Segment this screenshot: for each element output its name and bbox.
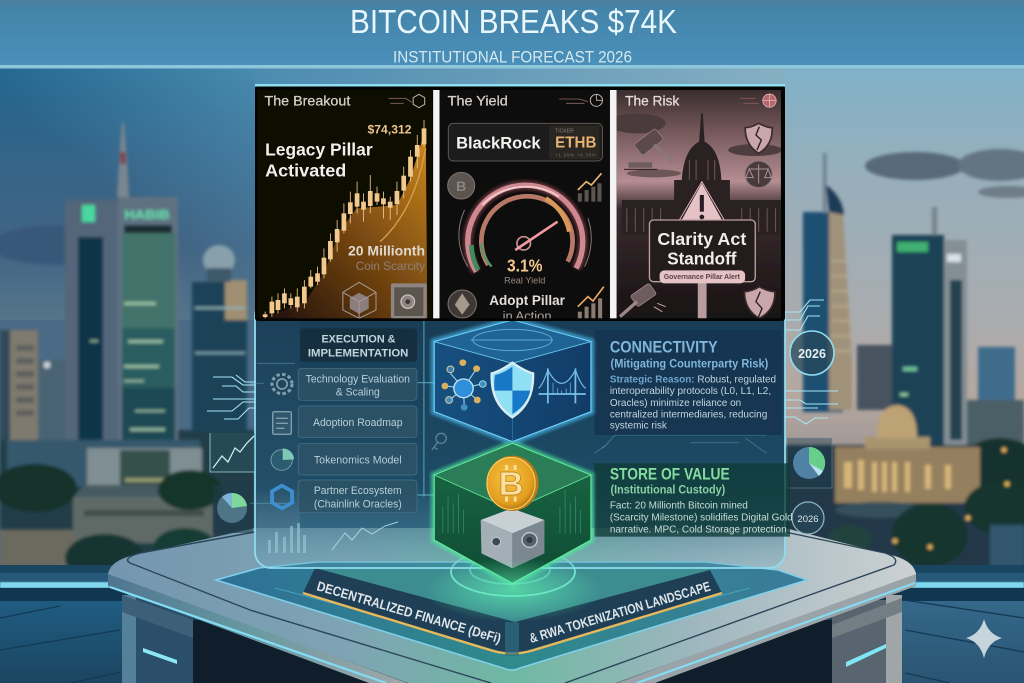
icon: shield (492, 363, 533, 417)
connectivity subheading: (Mitigating Counterparty Risk) (611, 357, 768, 370)
icon: safe (391, 283, 427, 318)
connectivity body: Strategic Reason: (610, 375, 695, 386)
connectivity text panel (594, 330, 782, 435)
card heading: the breakout: The Breakout (264, 94, 350, 109)
icon: circuit cube (389, 94, 425, 108)
hologram panel (207, 300, 838, 568)
pedestal label right: & RWA TOKENIZATION LANDSCAPE (528, 579, 712, 646)
icon: wire cube (343, 282, 376, 318)
lower dashboard (execution column, cubes, text panels) (250, 320, 796, 583)
warning sign: Standoff (667, 248, 737, 268)
headline: legacy pillar: Activated (265, 160, 346, 180)
icon: bitcoin coin (486, 456, 539, 511)
card: the risk (608, 90, 782, 318)
store of value text panel (594, 463, 796, 537)
2026 badge small (792, 502, 824, 534)
holo line chart (332, 522, 398, 550)
background: left skyline (0, 123, 255, 582)
card: the yield: Real Yield (504, 275, 545, 285)
2026 badge small: 2026 (797, 514, 819, 525)
card heading: the yield: The Yield (448, 94, 508, 109)
card: the yield (440, 90, 610, 323)
ticker box: TICKER (555, 128, 574, 134)
icon: gavel bottom (620, 283, 666, 317)
caption: adopt pillar: Adopt Pillar (489, 292, 565, 308)
icon: key (432, 433, 446, 450)
card heading: the risk: The Risk (625, 94, 679, 109)
sign: habib: HABIB (124, 207, 170, 222)
pedestal (303, 548, 722, 656)
three news cards (257, 90, 782, 323)
2026 badge large (790, 331, 834, 375)
table recess (216, 562, 807, 670)
store of value body: narrative. MPC, Cold Storage protection (610, 525, 787, 536)
item: technology evaluation (298, 368, 417, 400)
icon: cracked shield bottom (744, 287, 775, 318)
connectivity body: Oracles) minimize reliance on (610, 398, 741, 409)
icon: bitcoin coin: B (499, 465, 523, 503)
pedestal label left: DECENTRALIZED FINANCE (DeFi) (315, 578, 503, 646)
warning sign (649, 220, 755, 283)
icon: chainlink hexagon (272, 486, 292, 508)
left circuit lines (207, 375, 256, 419)
item: partner ecosystem: Partner Ecosystem (314, 485, 402, 497)
title: BITCOIN BREAKS $74K (350, 3, 677, 40)
item: technology evaluation: & Scaling (336, 386, 380, 398)
frame lines (250, 320, 767, 503)
subtitle: INSTITUTIONAL FORECAST 2026 (393, 48, 632, 66)
left pie chart (213, 485, 253, 533)
icon: circuit pie (559, 94, 602, 106)
icon: network nodes (441, 359, 486, 411)
execution header: IMPLEMENTATION (308, 347, 408, 359)
pedestal rings (451, 548, 575, 596)
floor and railing (0, 565, 1024, 683)
icon: circuit globe (740, 94, 776, 107)
item: adoption roadmap (298, 406, 417, 438)
store of value cube (434, 443, 591, 583)
caption: coin scarcity: Coin Scarcity (356, 259, 426, 273)
store of value subheading: (Institutional Custody) (611, 483, 725, 496)
item: tokenomics model: Tokenomics Model (314, 454, 402, 466)
warning sign: Governance Pillar Alert (664, 272, 740, 281)
card: the yield: in Action (503, 309, 552, 323)
icon: sparkle watermark (966, 619, 1002, 658)
holo bar chart (268, 523, 306, 553)
connectivity body: interoperability protocols (L0, L1, L2, (610, 386, 771, 397)
left leg light (143, 648, 177, 664)
execution header: EXECUTION & (321, 334, 395, 346)
store of value body: (Scarcity Milestone) solidifies Digital Gold (610, 513, 793, 524)
background: right skyline (785, 149, 1024, 575)
connectivity heading: CONNECTIVITY (610, 338, 718, 357)
icon: pie (271, 448, 294, 470)
headline: legacy pillar: Legacy Pillar (265, 140, 373, 160)
right circuit lines (785, 300, 838, 424)
right pie chart (787, 438, 832, 488)
table legs (122, 595, 902, 683)
store of value heading: STORE OF VALUE (610, 465, 730, 483)
item: tokenomics model (298, 443, 417, 475)
connectivity body: systemic risk (610, 421, 667, 432)
price label: $74,312 (368, 122, 412, 136)
ticker box: ETHB (555, 135, 596, 152)
connectivity body: Robust, regulated (695, 375, 776, 386)
top panel frame (255, 84, 785, 321)
background: sky (0, 68, 1024, 580)
connectivity body: centralized intermediaries, reducing (610, 409, 767, 420)
item: adoption roadmap: Adoption Roadmap (313, 417, 403, 429)
sign post (698, 282, 707, 318)
capitol building (622, 113, 781, 235)
icon: bitcoin token: B (456, 178, 466, 194)
tower (65, 200, 118, 448)
icon: bridge (539, 368, 586, 403)
icon: cracked shield top (745, 123, 772, 153)
item: technology evaluation: Technology Evaluation (306, 374, 410, 386)
left line chart (210, 433, 255, 472)
execution header (300, 328, 417, 362)
icon: growth chart top (578, 173, 601, 202)
icon: growth chart bottom (578, 287, 604, 318)
white dividers (433, 90, 617, 318)
icon: scales (745, 161, 772, 188)
2026 badge large: 2026 (798, 347, 826, 361)
ticker box (448, 123, 602, 161)
right leg light (846, 644, 886, 667)
connectivity cube (434, 320, 591, 442)
candlesticks (263, 120, 426, 318)
stat: 20 millionth: 20 Millionth (348, 243, 425, 259)
card: the breakout (257, 90, 432, 318)
warning triangle (679, 180, 724, 220)
green glow on pedestal (423, 558, 603, 622)
stat: 3.1% real yield: 3.1% (507, 256, 542, 276)
ticker box: +1.69% +6.35% (555, 152, 596, 157)
item: partner ecosystem: (Chainlink Oracles) (314, 498, 402, 510)
icon: gear (272, 374, 292, 394)
store of value body: Fact: 20 Millionth Bitcoin mined (610, 500, 748, 511)
item: partner ecosystem (298, 480, 417, 513)
yield gauge (459, 185, 591, 272)
table top (108, 528, 916, 683)
warning sign: Clarity Act (657, 229, 746, 249)
icon: vault (481, 508, 544, 568)
icon: clipboard (273, 412, 291, 434)
glow behind cubes (434, 320, 591, 583)
ticker box: BlackRock (456, 133, 541, 152)
icon: ethereum token (448, 290, 476, 318)
title card: gavel (624, 128, 672, 169)
icon: bitcoin token (448, 172, 475, 199)
header band (0, 0, 1024, 68)
